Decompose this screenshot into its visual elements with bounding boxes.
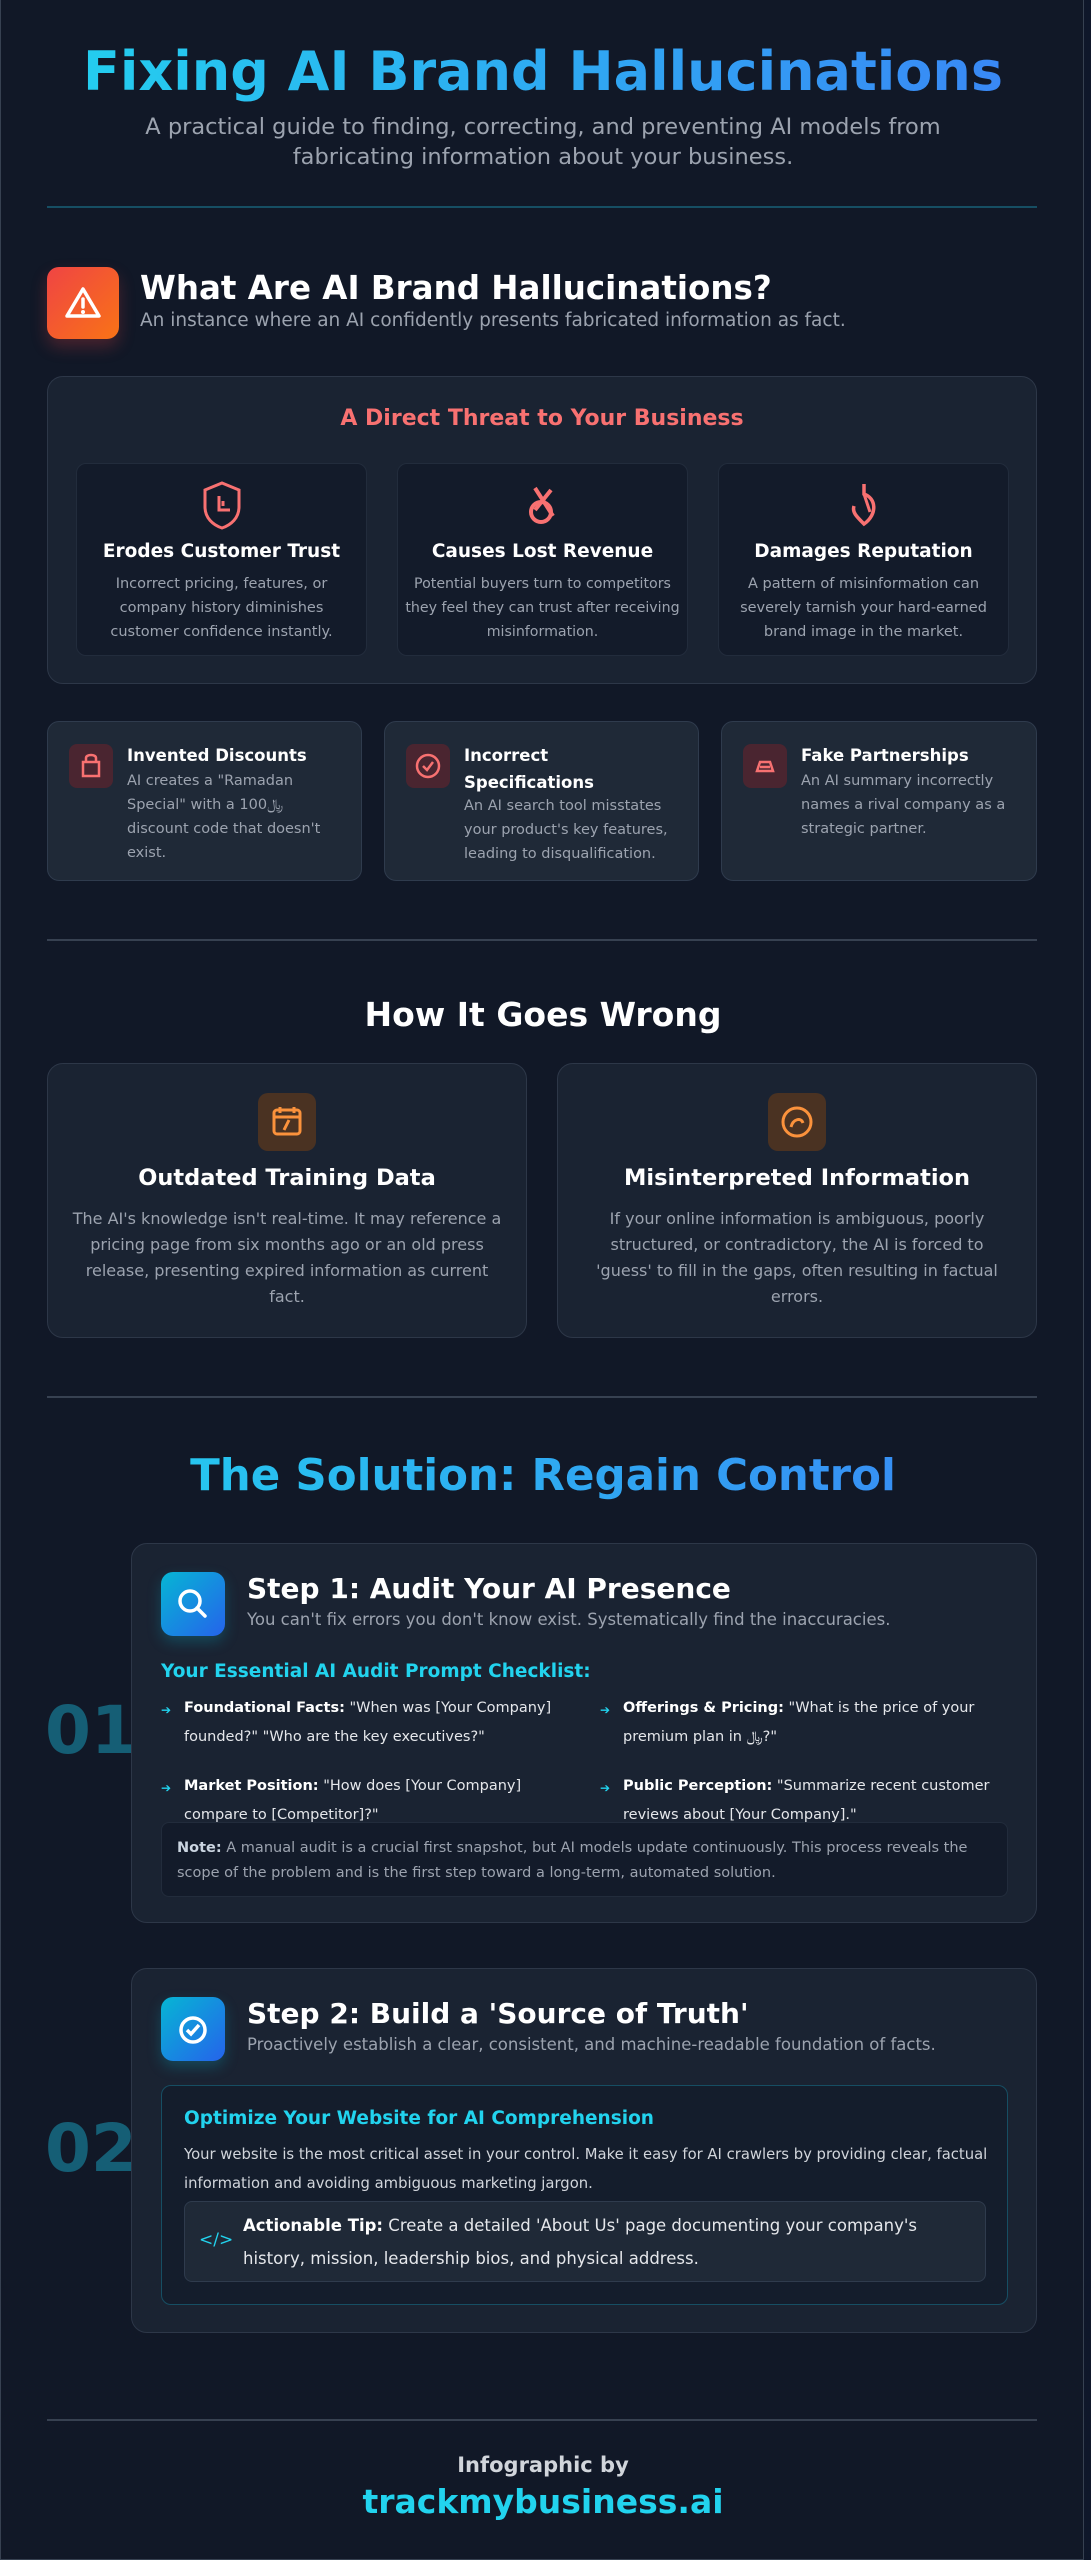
card: revenue [397,463,688,656]
card: trust: Erodes Customer Trust [103,541,340,562]
checklist items: Public Perception: "Summarize recent customer reviews about [Your Company]." [623,1778,990,1823]
icon: verified [161,1997,225,2061]
panel: direct threat [47,376,1037,684]
checklist heading: Your Essential AI Audit Prompt Checklist: [161,1661,591,1682]
example: incorrect specs: Specifications [464,773,594,792]
panel: step 2 [131,1968,1037,2333]
inner box: optimize website [161,2085,1008,2305]
card: revenue: Causes Lost Revenue [432,541,653,562]
subtitle: A practical guide to finding, correcting, and preventing AI models from fabricating information about your business. [145,114,941,170]
tip box [184,2201,986,2282]
example: incorrect specs: An AI search tool misstates your product's key features, leading to disqualification. [464,798,668,862]
checklist items: Market Position: "How does [Your Company] compare to [Competitor]?" [184,1778,521,1823]
tip box: Actionable Tip: Create a detailed 'About Us' page documenting your company's history, mission, leadership bios, and physical address. [243,2216,917,2268]
checklist items: ➔ [161,1781,171,1795]
panel: step 1 [131,1543,1037,1923]
example: incorrect specs: Incorrect [464,746,548,765]
footer: Infographic by [457,2453,629,2477]
icon: calendar [258,1093,316,1151]
heading: how it goes wrong: How It Goes Wrong [365,995,721,1034]
icon: confused [768,1093,826,1151]
icon: warning [47,267,119,339]
icon: handshake [743,744,787,788]
example: fake partnerships: Fake Partnerships [801,746,969,765]
card: trust: Incorrect pricing, features, or company history diminishes customer confidence instantly. [110,576,333,640]
panel: step 1: Step 1: Audit Your AI Presence [247,1572,731,1605]
definition: An instance where an AI confidently presents fabricated information as fact. [140,310,846,331]
checklist items: ➔ [600,1703,610,1717]
inner box: optimize website: Your website is the most critical asset in your control. Make it easy for AI crawlers by providing clear, factual information and avoiding ambiguous marketing jargon. [184,2146,987,2192]
card: misinterpreted: If your online information is ambiguous, poorly structured, or contradictory, the AI is forced to 'guess' to fill in the gaps, often resulting in factual errors. [596,1209,998,1306]
example: fake partnerships: An AI summary incorrectly names a rival company as a strategic partner. [801,773,1005,837]
card: outdated data [47,1063,527,1338]
footer [362,2453,724,2521]
card: misinterpreted: Misinterpreted Information [624,1165,970,1191]
heading: what are: What Are AI Brand Hallucinations? [140,269,772,307]
footer: trackmybusiness.ai [362,2482,724,2521]
card: reputation: A pattern of misinformation can severely tarnish your hard-earned brand image in the market. [740,576,987,640]
panel: step 2: Step 2: Build a 'Source of Truth' [247,1997,749,2030]
card: outdated data: Outdated Training Data [138,1165,436,1191]
card: revenue: Potential buyers turn to competitors they feel they can trust after receiving misinformation. [405,576,680,640]
icon: code: </> [199,2230,233,2250]
card: reputation: Damages Reputation [754,541,973,562]
card: misinterpreted [557,1063,1037,1338]
example: invented discounts: Invented Discounts [127,746,307,765]
card: trust [76,463,367,656]
icon: search [161,1572,225,1636]
heading: solution: The Solution: Regain Control [190,1451,896,1501]
note box [161,1822,1008,1897]
checklist items [161,1700,990,1823]
icon: check [406,744,450,788]
number 02: 02 [45,2110,137,2187]
checklist items: Offerings & Pricing: "What is the price of your premium plan in ﷼?" [623,1700,974,1745]
heading: solution [1,1447,1085,1505]
example: incorrect specs [384,721,699,881]
inner box: optimize website: Optimize Your Website for AI Comprehension [184,2108,654,2129]
example: fake partnerships [721,721,1037,881]
example: invented discounts [47,721,362,881]
panel heading: A Direct Threat to Your Business [340,406,744,431]
note box: Note: A manual audit is a crucial first snapshot, but AI models update continuously. This process reveals the scope of the problem and is the first step toward a long-term, automated solution. [177,1840,967,1881]
icon: bag [69,744,113,788]
panel: step 2: Proactively establish a clear, consistent, and machine-readable foundation of facts. [247,2035,936,2054]
checklist items: ➔ [161,1703,171,1717]
panel: step 1: You can't fix errors you don't know exist. Systematically find the inaccuracies. [247,1610,890,1629]
checklist items: ➔ [600,1781,610,1795]
example: invented discounts: AI creates a "Ramadan Special" with a 100﷼ discount code that doesn't exist. [127,773,320,861]
card: outdated data: The AI's knowledge isn't real-time. It may reference a pricing page from six months ago or an old press release, presenting expired information as current fact. [73,1209,501,1306]
number 01: 01 [45,1692,137,1769]
card: reputation [718,463,1009,656]
checklist items: Foundational Facts: "When was [Your Company] founded?" "Who are the key executives?" [184,1700,551,1745]
title: Fixing AI Brand Hallucinations [83,40,1003,103]
